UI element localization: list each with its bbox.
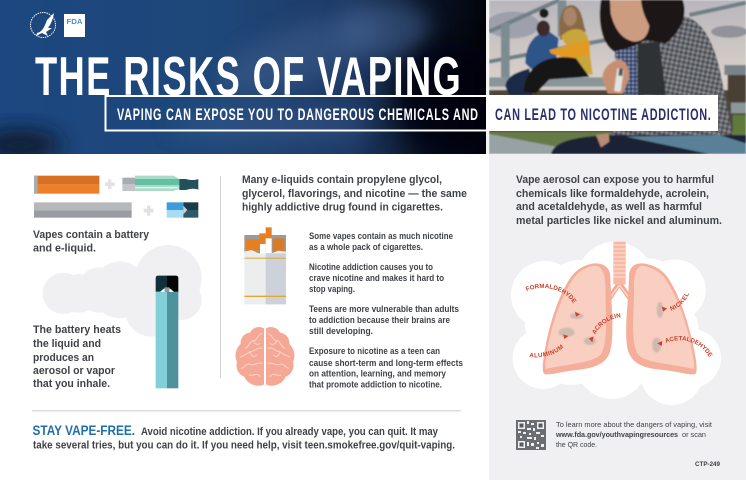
panel: how vapes work (33, 176, 202, 388)
text: vapes contain: Vapes contain a battery (33, 229, 150, 241)
HHS seal (30, 12, 56, 38)
text: nicotine facts: on attention, learning, and memory (309, 368, 446, 378)
QR code (516, 420, 546, 450)
callout: stay vape-free: take several tries, but you can do it. If you need help, visit teen.smokefree.gov/quit-vaping. (33, 440, 455, 452)
text: learn more: the QR code. (556, 440, 597, 449)
text: battery heats: The battery heats (33, 324, 121, 336)
chemical labels (526, 284, 713, 358)
text: nicotine facts: to addiction because their brains are (309, 315, 450, 325)
text: nicotine facts: Nicotine addiction causes you to (309, 262, 434, 272)
cloud background (511, 242, 721, 405)
boy shirt (609, 17, 733, 142)
text: aerosol chemicals: Vape aerosol can expose you to harmful (516, 174, 714, 186)
left lung (543, 263, 612, 374)
text: learn more: To learn more about the dangers of vaping, visit (556, 420, 712, 429)
icon: cigarette pack (244, 227, 286, 304)
photo: teens on bleachers (486, 0, 746, 154)
icon: vape device (156, 276, 178, 388)
FDA badge: FDA (66, 17, 83, 26)
text: aerosol chemicals: chemicals like formaldehyde, acrolein, (516, 188, 709, 200)
icon: first vape parts (34, 176, 198, 194)
text: vapes contain: and e-liquid. (33, 242, 96, 254)
text: battery heats: aerosol or vapor (33, 365, 116, 377)
text: e-liquids intro: Many e-liquids contain propylene glycol, (242, 174, 442, 186)
text: nicotine facts: Teens are more vulnerable than adults (309, 304, 459, 314)
callout: stay vape-free: STAY VAPE-FREE. (32, 423, 135, 438)
subtitle outlined box (106, 96, 486, 130)
cloud: vapor (43, 245, 202, 337)
chemical labels: FORMALDEHYDE (526, 284, 576, 304)
chemical labels: ACROLEIN (592, 313, 620, 334)
chemical labels: ALUMINUM (529, 344, 564, 358)
text: nicotine facts: Some vapes contain as much nicotine (309, 231, 453, 241)
text: nicotine facts: crave nicotine and makes it hard to (309, 273, 445, 283)
text: nicotine facts: cause short-term and long-term effects (309, 358, 463, 368)
diagram: lungs (511, 242, 721, 405)
text: learn more: or scan (682, 430, 706, 439)
right lung (626, 263, 697, 374)
text: document code: CTP-249 (695, 461, 720, 468)
hand and vape (602, 59, 629, 94)
text: aerosol chemicals: and acetaldehyde, as well as harmful (516, 201, 702, 213)
boy hair (600, 0, 685, 52)
subtitle white box (486, 95, 718, 131)
text: aerosol chemicals: metal particles like nickel and aluminum. (516, 215, 722, 227)
chemical labels: ACETALDEHYDE (666, 336, 713, 358)
logos (30, 12, 85, 38)
white separator (486, 0, 489, 154)
text: nicotine facts: that promote addiction to nicotine. (309, 380, 442, 390)
text: nicotine facts: Exposure to nicotine as a teen can (309, 346, 440, 356)
middle teen (559, 5, 586, 40)
text: nicotine facts: stop vaping. (309, 284, 355, 294)
callout: stay vape-free (32, 423, 455, 452)
icon: second vape parts (34, 202, 198, 218)
text: e-liquids intro: glycerol, flavorings, and nicotine — the same (242, 188, 467, 200)
text: battery heats: produces an (33, 352, 94, 364)
left teen (525, 32, 559, 73)
particle deposits (559, 302, 663, 352)
text: e-liquids intro: highly addictive drug found in cigarettes. (242, 202, 443, 214)
text: nicotine facts: still developing. (309, 326, 373, 336)
subtitle white box: CAN LEAD TO NICOTINE ADDICTION. (495, 105, 711, 124)
trachea and bronchi (608, 242, 631, 300)
title: THE RISKS OF VAPING (35, 45, 461, 107)
text: nicotine facts: as a whole pack of cigarettes. (309, 242, 423, 252)
header banner background (0, 0, 505, 161)
text: battery heats: that you inhale. (33, 378, 110, 390)
chemical labels: NICKEL (670, 294, 689, 311)
lower band (489, 134, 556, 154)
icon: brain (236, 327, 294, 386)
text: battery heats: the liquid and (33, 338, 101, 350)
text: learn more: www.fda.gov/youthvapingresources (555, 430, 678, 439)
callout: stay vape-free: Avoid nicotine addiction. If you already vape, you can quit. It may (141, 426, 439, 438)
text: nicotine facts (309, 231, 463, 390)
panel: right column (489, 154, 746, 480)
boy face (610, 0, 649, 41)
subtitle outlined box: VAPING CAN EXPOSE YOU TO DANGEROUS CHEMICALS AND (117, 105, 478, 124)
